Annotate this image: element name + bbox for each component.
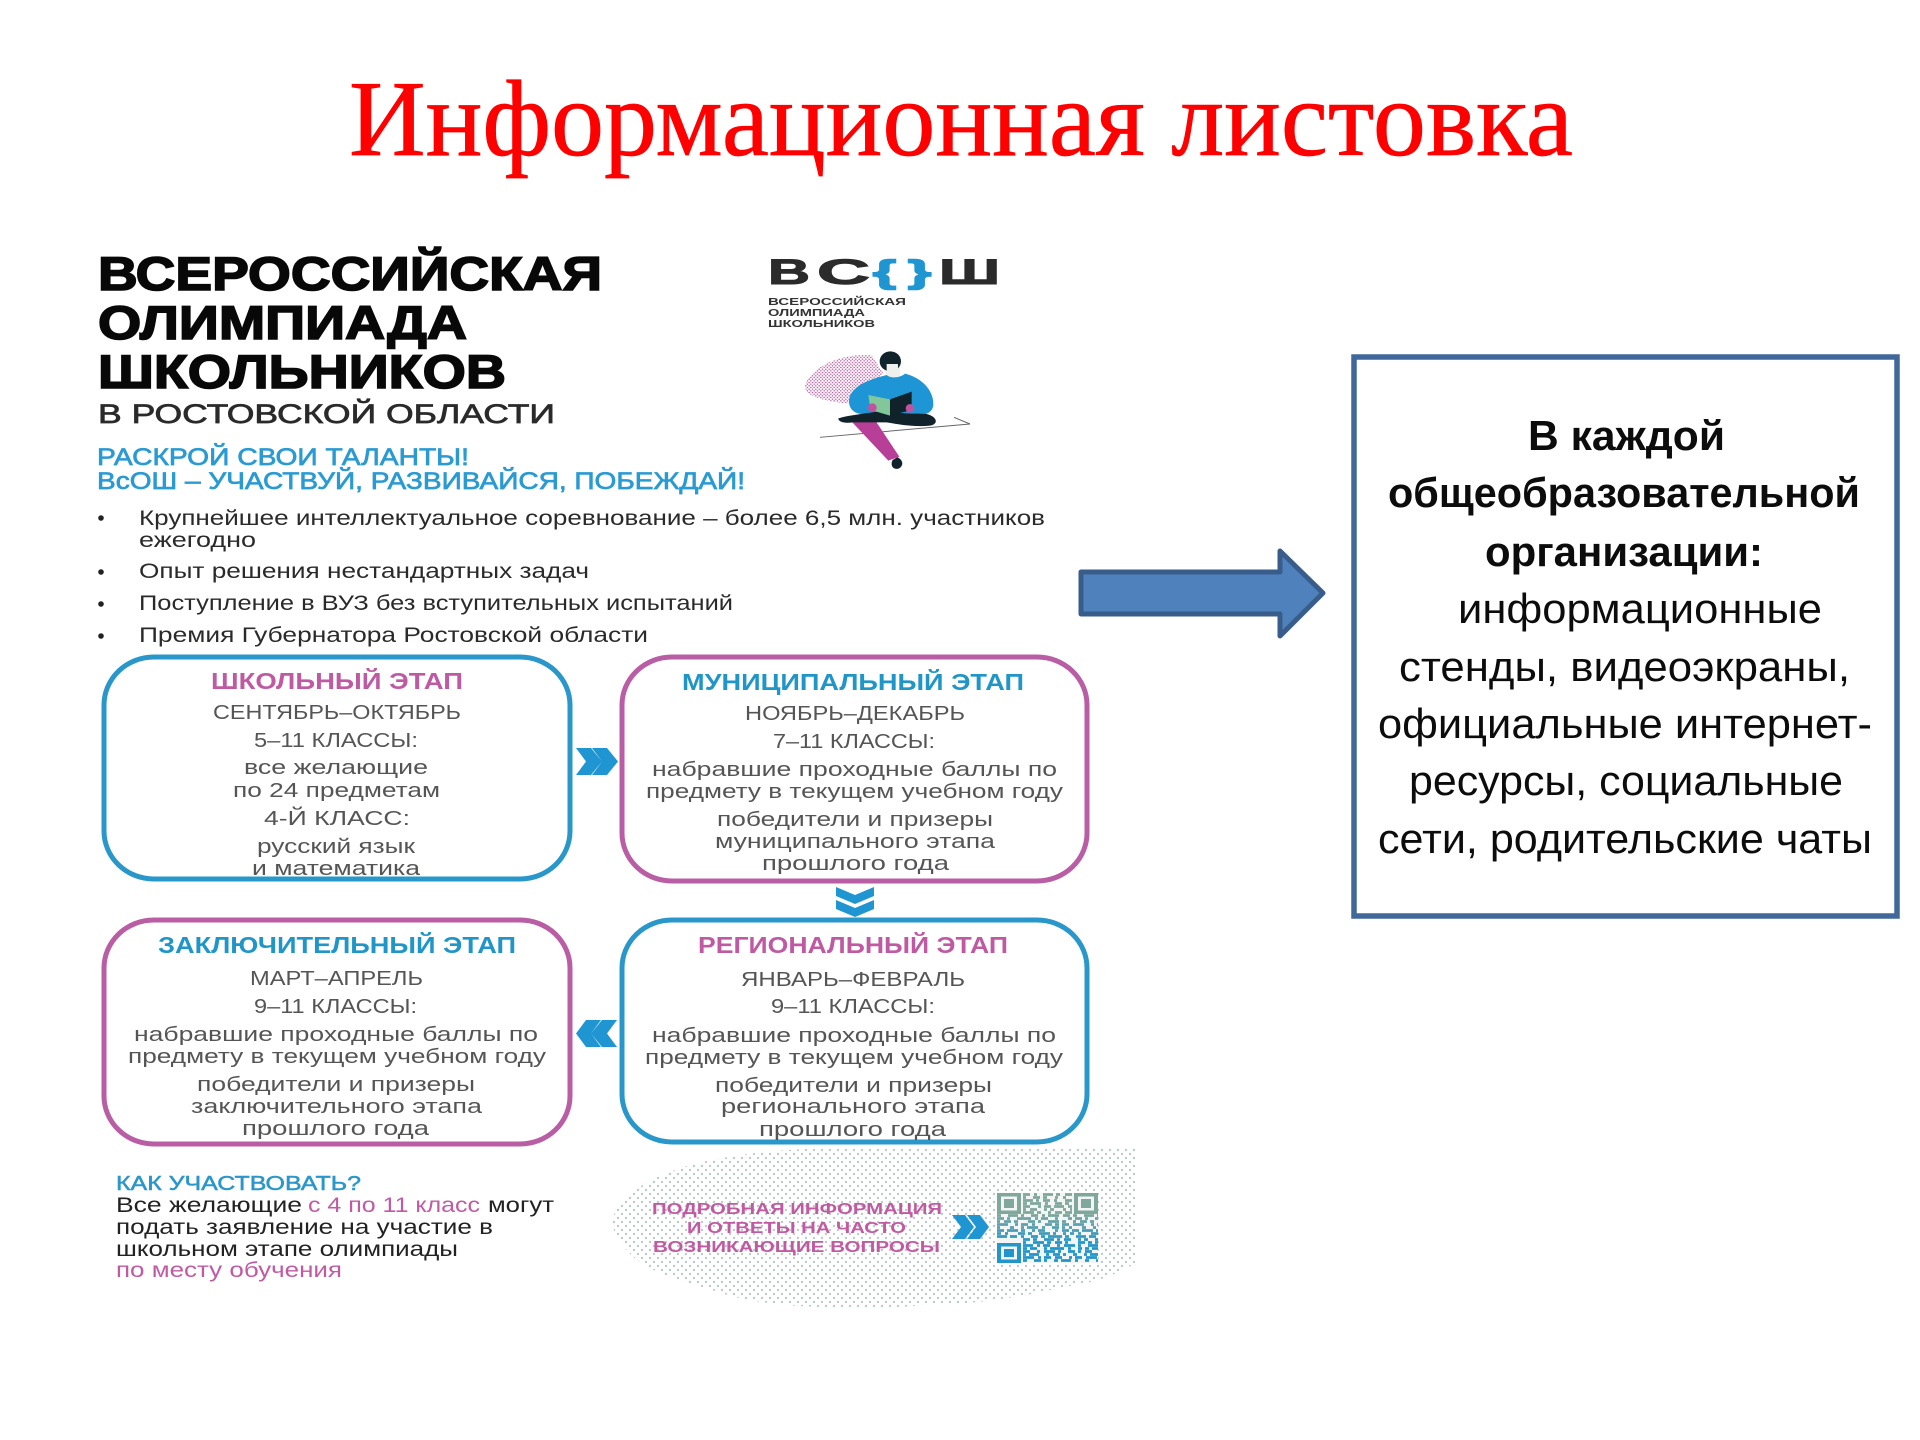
panel: school stage: 4-Й КЛАСС:: [264, 806, 410, 830]
how to participate text: школьном этапе олимпиады: [116, 1238, 458, 1261]
logo: ВсОШ: {: [873, 254, 896, 290]
panel: final stage: заключительного этапа: [191, 1095, 483, 1118]
panel: distribution channels: организации:: [1485, 528, 1763, 575]
panel: regional stage: предмету в текущем учебном году: [645, 1046, 1064, 1069]
how to participate text: КАК УЧАСТВОВАТЬ?: [116, 1173, 361, 1195]
arrow: municipal to regional: [836, 887, 874, 917]
panel: municipal stage: 7–11 КЛАССЫ:: [773, 730, 935, 753]
how to participate text: [116, 1173, 554, 1282]
benefits list: Опыт решения нестандартных задач: [139, 560, 589, 583]
panel: distribution channels: общеобразовательной: [1388, 469, 1860, 516]
panel: final stage: ЗАКЛЮЧИТЕЛЬНЫЙ ЭТАП: [158, 931, 516, 958]
benefits list: Крупнейшее интеллектуальное соревнование – более 6,5 млн. участников: [139, 507, 1045, 530]
panel: final stage: прошлого года: [242, 1117, 430, 1140]
panel: distribution channels: В каждой: [1528, 412, 1725, 459]
benefits list: Поступление в ВУЗ без вступительных испытаний: [139, 592, 733, 615]
panel: final stage: МАРТ–АПРЕЛЬ: [250, 967, 423, 990]
poster heading: ВСЕРОССИЙСКАЯ: [98, 247, 602, 300]
title: Информационная листовка: [349, 60, 1573, 179]
panel: school stage: 5–11 КЛАССЫ:: [254, 729, 418, 752]
panel: final stage: [104, 920, 570, 1144]
panel: school stage: ШКОЛЬНЫЙ ЭТАП: [211, 667, 463, 694]
panel: school stage: по 24 предметам: [233, 779, 440, 802]
arrow: regional to final: [576, 1020, 617, 1047]
how to participate text: Все желающие: [116, 1194, 302, 1217]
panel: municipal stage: победители и призеры: [717, 808, 993, 831]
benefits list: ежегодно: [139, 529, 256, 552]
panel: regional stage: РЕГИОНАЛЬНЫЙ ЭТАП: [698, 931, 1008, 958]
panel: distribution channels: информационные: [1458, 585, 1822, 632]
panel: distribution channels: ресурсы, социальные: [1409, 757, 1843, 804]
panel: distribution channels: [1354, 357, 1897, 916]
poster heading: [98, 247, 602, 429]
logo: ВсОШ: ОЛИМПИАДА: [768, 308, 865, 319]
panel: distribution channels: сети, родительские чаты: [1378, 815, 1872, 862]
panel: distribution channels: стенды, видеоэкраны,: [1399, 643, 1850, 690]
logo: ВсОШ: Ш: [939, 253, 1000, 292]
logo: ВсОШ: ШКОЛЬНИКОВ: [768, 319, 875, 330]
logo: ВсОШ: ВСЕРОССИЙСКАЯ: [768, 295, 906, 308]
logo: ВсОШ: В: [768, 253, 810, 292]
panel: regional stage: [622, 920, 1087, 1142]
panel: final stage: набравшие проходные баллы по: [134, 1023, 538, 1046]
panel: municipal stage: предмету в текущем учебном году: [646, 780, 1064, 803]
panel: final stage: 9–11 КЛАССЫ:: [254, 995, 417, 1018]
callout: more information with QR code: ПОДРОБНАЯ ИНФОРМАЦИЯ: [652, 1201, 942, 1218]
panel: municipal stage: [622, 657, 1087, 881]
benefits list: [98, 507, 1045, 647]
callout: more information with QR code: И ОТВЕТЫ НА ЧАСТО: [687, 1220, 906, 1237]
panel: school stage: все желающие: [244, 756, 428, 779]
slogan: РАСКРОЙ СВОИ ТАЛАНТЫ!: [97, 443, 469, 471]
QR code: [997, 1193, 1098, 1263]
panel: municipal stage: набравшие проходные баллы по: [652, 758, 1057, 781]
panel: regional stage: набравшие проходные баллы по: [652, 1024, 1056, 1047]
callout: more information with QR code: ВОЗНИКАЮЩИЕ ВОПРОСЫ: [653, 1239, 940, 1256]
panel: regional stage: победители и призеры: [715, 1074, 992, 1097]
arrow: school to municipal: [576, 748, 618, 775]
benefits list: Премия Губернатора Ростовской области: [139, 624, 648, 647]
arrow: to QR code: [952, 1215, 989, 1239]
callout: more information with QR code: [613, 1148, 1136, 1309]
panel: regional stage: регионального этапа: [721, 1095, 986, 1118]
poster heading: ШКОЛЬНИКОВ: [98, 345, 506, 398]
panel: school stage: русский язык: [257, 835, 416, 858]
panel: final stage: предмету в текущем учебном году: [128, 1045, 547, 1068]
panel: municipal stage: МУНИЦИПАЛЬНЫЙ ЭТАП: [682, 668, 1024, 695]
panel: school stage: СЕНТЯБРЬ–ОКТЯБРЬ: [213, 701, 461, 724]
panel: distribution channels: официальные интернет-: [1378, 700, 1872, 747]
how to participate text: по месту обучения: [116, 1259, 342, 1282]
icon: student reading a book: [805, 351, 970, 469]
how to participate text: подать заявление на участие в: [116, 1216, 493, 1239]
poster: olympiad leaflet: [97, 247, 1136, 1309]
panel: municipal stage: прошлого года: [762, 852, 950, 875]
arrow: poster to info box: [1081, 551, 1323, 636]
panel: municipal stage: НОЯБРЬ–ДЕКАБРЬ: [745, 702, 965, 725]
logo: ВсОШ: }: [908, 254, 931, 290]
logo: ВсОШ: С: [817, 253, 870, 292]
slogan: ВсОШ – УЧАСТВУЙ, РАЗВИВАЙСЯ, ПОБЕЖДАЙ!: [97, 467, 745, 495]
poster heading: ОЛИМПИАДА: [98, 296, 467, 349]
how to participate text: с 4 по 11 класс: [308, 1194, 480, 1217]
panel: school stage: [104, 657, 570, 880]
how to participate text: могут: [488, 1194, 554, 1217]
slogan: [97, 443, 745, 495]
panel: municipal stage: муниципального этапа: [715, 830, 996, 853]
poster heading: В РОСТОВСКОЙ ОБЛАСТИ: [98, 398, 555, 429]
panel: regional stage: прошлого года: [759, 1118, 947, 1141]
panel: regional stage: 9–11 КЛАССЫ:: [771, 995, 935, 1018]
panel: regional stage: ЯНВАРЬ–ФЕВРАЛЬ: [741, 968, 965, 991]
logo: ВсОШ: [768, 253, 1000, 330]
panel: final stage: победители и призеры: [197, 1073, 475, 1096]
panel: school stage: и математика: [252, 857, 421, 880]
